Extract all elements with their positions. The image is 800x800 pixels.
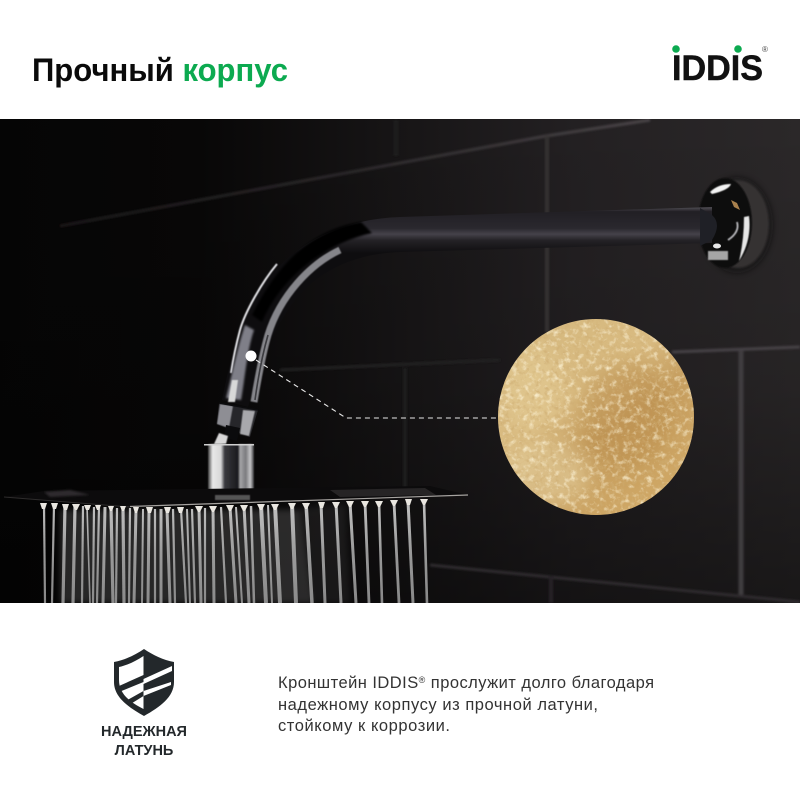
logo: IDDIS: IDDIS (672, 49, 763, 88)
logo: IDDIS: ® (762, 45, 768, 54)
photo: shower on dark tile wall (0, 119, 800, 603)
water streams (40, 499, 428, 603)
description text: стойкому к коррозии. (278, 717, 450, 735)
shower arm (214, 177, 773, 444)
description text: надежному корпусу из прочной латуни, (278, 696, 598, 714)
shower head plate (4, 486, 468, 507)
arm tube (304, 207, 712, 248)
icon label (101, 724, 187, 759)
brass texture circle (498, 319, 694, 515)
description text: Кронштейн IDDIS (278, 674, 418, 692)
description text: прослужит долго благодаря (426, 674, 654, 692)
callout line with dot (246, 350, 498, 418)
icon label: НАДЕЖНАЯ (101, 724, 187, 740)
tile wall background (0, 119, 800, 603)
ring and lower joint (217, 403, 258, 437)
shower cylinder (204, 444, 254, 494)
icon: shield (114, 649, 174, 716)
title: Прочный корпус (32, 52, 288, 88)
lower neck highlights (231, 264, 277, 373)
wall flange (698, 177, 773, 273)
description text: ® (419, 675, 426, 685)
icon label: ЛАТУНЬ (115, 743, 173, 759)
description text (278, 674, 654, 735)
